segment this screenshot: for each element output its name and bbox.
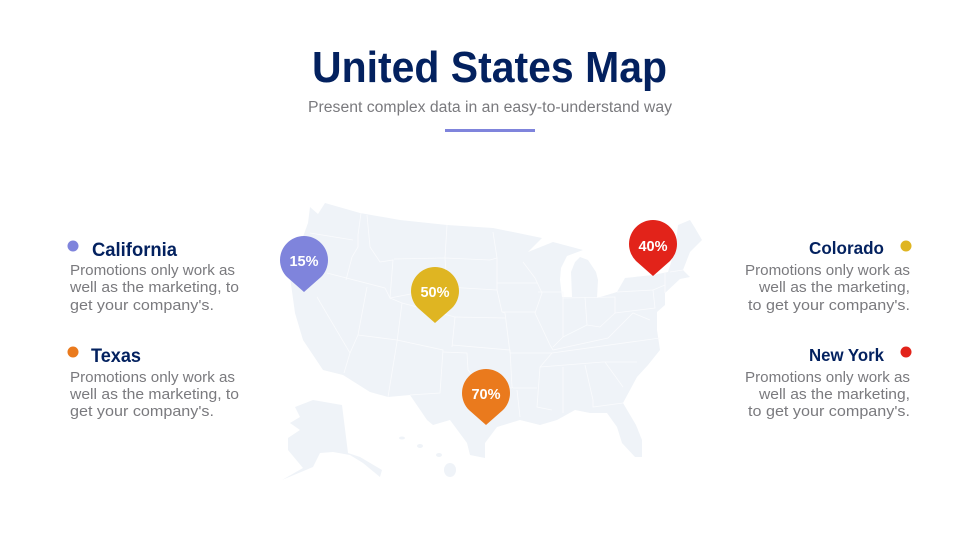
header <box>308 43 672 132</box>
pin: 15%: 15% <box>289 254 319 270</box>
pin: 15% <box>280 236 328 292</box>
callout: California: Promotions only work as <box>70 262 235 279</box>
callout: California: get your company's. <box>70 297 214 314</box>
callout: New York: New York <box>809 345 884 365</box>
callout: New York: to get your company's. <box>748 403 910 420</box>
callout: New York <box>745 345 912 420</box>
callout: Texas: well as the marketing, to <box>69 386 239 403</box>
state borders <box>310 213 683 417</box>
callout: California <box>68 240 239 314</box>
callout: Colorado: well as the marketing, <box>758 279 910 296</box>
callout: Texas: get your company's. <box>70 403 214 420</box>
callout: Texas <box>68 346 239 420</box>
map of the United States <box>282 203 702 480</box>
pin: 40% <box>629 220 677 276</box>
pin: 50%: 50% <box>420 285 450 301</box>
pin: 70%: 70% <box>471 387 501 403</box>
pin: 50% <box>411 267 459 323</box>
contiguous states <box>290 203 702 458</box>
callout: Colorado: to get your company's. <box>748 297 910 314</box>
callout: Texas: Texas <box>91 346 141 367</box>
callout: New York: well as the marketing, <box>758 386 910 403</box>
pin: 70% <box>462 369 510 425</box>
callout: New York: Promotions only work as <box>745 369 910 386</box>
title: United States Map <box>312 43 667 92</box>
title underline <box>445 129 535 132</box>
callout: Colorado: Promotions only work as <box>745 262 910 279</box>
subtitle: Present complex data in an easy-to-understand way <box>308 99 672 116</box>
callout: Texas: Promotions only work as <box>70 369 235 386</box>
callout: Colorado <box>745 238 912 314</box>
callout: California: California <box>92 240 177 261</box>
Alaska <box>282 400 382 480</box>
pin: 40%: 40% <box>638 239 668 255</box>
callout: Colorado: Colorado <box>809 238 884 258</box>
Hawaii <box>399 436 456 477</box>
callout: California: well as the marketing, to <box>69 279 239 296</box>
